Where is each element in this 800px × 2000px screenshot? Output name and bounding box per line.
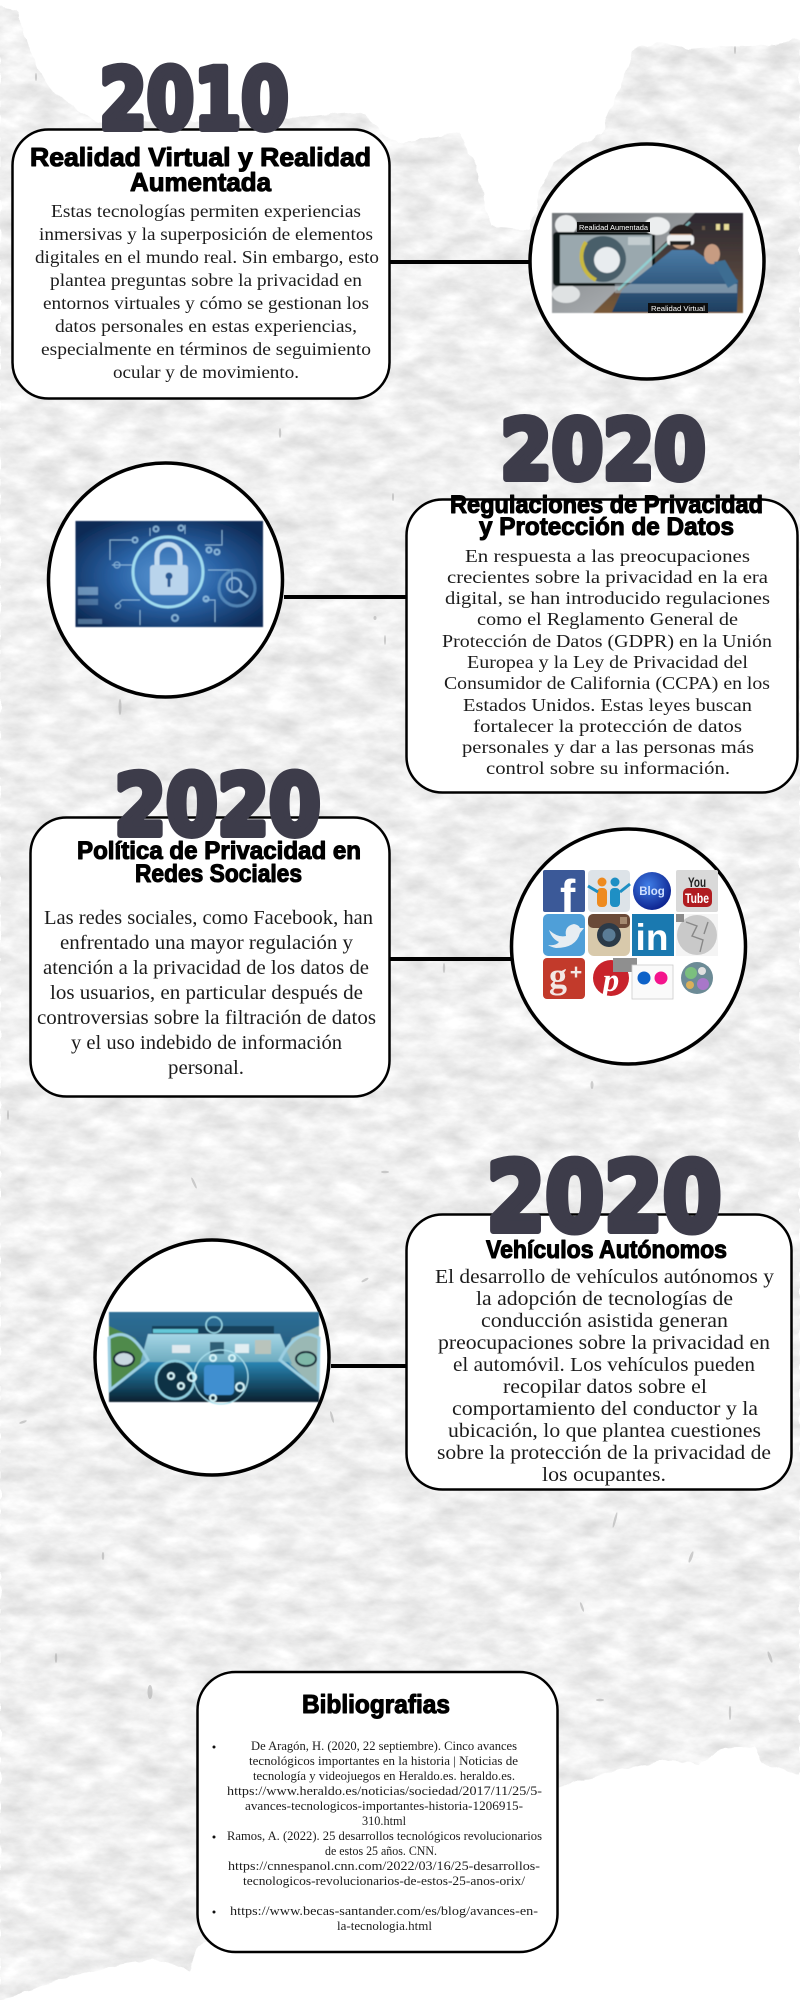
body text: realidad virtual: datos personales en estas experiencias, — [55, 316, 357, 336]
panel: regulaciones de privacidad — [406, 491, 798, 792]
icon: youtube: You — [688, 874, 706, 890]
icon: youtube: Tube — [685, 890, 709, 906]
icon: wikipedia — [676, 914, 718, 956]
icon: linkedin: in — [636, 917, 668, 958]
body text: redes sociales: Las redes sociales, como Facebook, han — [44, 908, 373, 929]
label: realidad aumentada: Realidad Aumentada — [579, 223, 649, 232]
photo circle: interior de coche autónomo — [95, 1240, 329, 1475]
reference 3: la-tecnologia.html — [337, 1918, 432, 1933]
panel: bibliografías — [198, 1672, 558, 1952]
reference 1 — [212, 1738, 542, 1828]
reference 1: avances-tecnologicos-importantes-historia-1206915- — [245, 1798, 523, 1813]
body text: regulaciones: En respuesta a las preocupaciones — [465, 546, 750, 566]
panel: realidad virtual — [12, 130, 390, 398]
reference 2: tecnologicos-revolucionarios-de-estos-25-anos-orix/ — [243, 1873, 525, 1888]
photo circle: candado digital — [48, 463, 282, 697]
body text: realidad virtual: ocular y de movimiento. — [113, 362, 299, 382]
reference 1: tecnológicos importantes en la historia | Noticias de — [249, 1753, 518, 1768]
reference list — [212, 1738, 542, 1933]
body text: realidad virtual: inmersivas y la superposición de elementos — [39, 224, 373, 244]
body text: realidad virtual: entornos virtuales y cómo se gestionan los — [43, 293, 369, 313]
body text: realidad virtual: Estas tecnologías permiten experiencias — [51, 201, 361, 221]
body text: redes sociales: enfrentado una mayor regulación y — [60, 933, 353, 954]
heading: regulaciones: Regulaciones de Privacidad — [450, 491, 763, 519]
heading: realidad virtual: Realidad Virtual y Realidad — [30, 142, 371, 172]
heading: realidad virtual: Aumentada — [130, 167, 272, 197]
body text: regulaciones: control sobre su información. — [486, 758, 730, 778]
body text: redes sociales — [37, 908, 376, 1079]
body text: vehículos autónomos: conducción asistida generan — [481, 1311, 728, 1332]
icon: blog — [633, 872, 671, 910]
body text: redes sociales: y el uso indebido de información — [71, 1033, 342, 1054]
reference 1: 310.html — [362, 1813, 406, 1828]
icon: pinterest — [593, 958, 640, 999]
body text: vehículos autónomos: la adopción de tecnologías de — [476, 1289, 733, 1310]
icon: instagram — [588, 914, 630, 956]
body text: redes sociales: controversias sobre la filtración de datos — [37, 1008, 376, 1029]
photo circle: realidad aumentada y virtual — [530, 144, 764, 379]
panel: política de privacidad en redes sociales — [30, 818, 390, 1096]
connector line 4 — [331, 1364, 406, 1368]
icon: pinterest: p — [600, 963, 619, 999]
reference 1: De Aragón, H. (2020, 22 septiembre). Cinco avances — [251, 1738, 517, 1753]
heading: redes sociales — [77, 837, 361, 888]
icon: google plus — [543, 956, 585, 999]
body text: vehículos autónomos: comportamiento del conductor y la — [452, 1399, 758, 1420]
body text: regulaciones: Estados Unidos. Estas leyes buscan — [463, 695, 752, 715]
reference 1: https://www.heraldo.es/noticias/sociedad/2017/11/25/5- — [227, 1783, 542, 1798]
body text: vehículos autónomos — [435, 1267, 774, 1486]
heading: redes sociales: Redes Sociales — [135, 860, 302, 888]
icon: blog: Blog — [639, 886, 665, 898]
body text: vehículos autónomos: El desarrollo de vehículos autónomos y — [435, 1267, 774, 1288]
heading: realidad virtual — [30, 142, 371, 197]
icon: slideshare — [588, 870, 630, 912]
body text: vehículos autónomos: los ocupantes. — [542, 1465, 666, 1486]
icon: google plus: g — [549, 956, 567, 996]
body text: regulaciones: fortalecer la protección de datos — [473, 716, 742, 736]
reference 2: Ramos, A. (2022). 25 desarrollos tecnológicos revolucionarios — [227, 1828, 542, 1843]
body text: regulaciones — [442, 546, 772, 778]
year 2020 (regulaciones): 2020 — [500, 404, 706, 498]
icon: flickr — [632, 965, 673, 999]
reference 1: tecnología y videojuegos en Heraldo.es. heraldo.es. — [253, 1768, 515, 1783]
label: realidad virtual: Realidad Virtual — [651, 304, 705, 313]
heading: bibliografías: Bibliografias — [302, 1689, 450, 1719]
body text: regulaciones: Europea y la Ley de Privacidad del — [467, 652, 748, 672]
body text: regulaciones: personales y dar a las personas más — [462, 737, 754, 757]
reference 3: https://www.becas-santander.com/es/blog/avances-en- — [230, 1903, 538, 1918]
icon: google plus: + — [570, 961, 582, 984]
icon: twitter — [543, 914, 585, 956]
year 2020 (redes sociales): 2020 — [114, 756, 320, 854]
body text: realidad virtual: plantea preguntas sobre la privacidad en — [50, 270, 362, 290]
body text: redes sociales: los usuarios, en particular después de — [50, 983, 363, 1004]
heading: regulaciones: y Protección de Datos — [479, 513, 734, 541]
reference 3 — [212, 1903, 538, 1933]
body text: vehículos autónomos: ubicación, lo que plantea cuestiones — [448, 1421, 761, 1442]
body text: vehículos autónomos: preocupaciones sobre la privacidad en — [438, 1333, 770, 1354]
year 2010: 2010 — [100, 50, 288, 148]
icon: colour globe — [681, 962, 713, 994]
body text: vehículos autónomos: el automóvil. Los vehículos pueden — [453, 1355, 755, 1376]
icon: facebook: f — [560, 870, 576, 922]
photo circle: iconos de redes sociales — [512, 829, 746, 1064]
connector line 1 — [389, 260, 531, 264]
reference 2: https://cnnespanol.cnn.com/2022/03/16/25-desarrollos- — [228, 1858, 540, 1873]
body text: regulaciones: Protección de Datos (GDPR) en la Unión — [442, 631, 772, 652]
panel: vehículos autónomos — [406, 1214, 792, 1490]
connector line 3 — [390, 957, 511, 961]
body text: regulaciones: digital, se han introducido regulaciones — [445, 588, 770, 608]
icon: facebook — [543, 870, 585, 922]
body text: regulaciones: Consumidor de California (CCPA) en los — [444, 673, 770, 694]
connector line 2 — [284, 595, 406, 599]
body text: realidad virtual: digitales en el mundo real. Sin embargo, esto — [35, 247, 379, 267]
reference 2 — [212, 1828, 542, 1888]
reference 2: de estos 25 años. CNN. — [325, 1843, 437, 1858]
heading: regulaciones — [450, 491, 763, 541]
body text: regulaciones: como el Reglamento General de — [477, 609, 738, 629]
body text: realidad virtual: especialmente en términos de seguimiento — [41, 339, 371, 359]
icon: youtube — [676, 870, 718, 912]
heading: redes sociales: Política de Privacidad en — [77, 837, 361, 865]
body text: redes sociales: personal. — [168, 1058, 244, 1079]
body text: regulaciones: crecientes sobre la privacidad en la era — [447, 567, 768, 587]
heading: vehículos autónomos: Vehículos Autónomos — [486, 1236, 727, 1264]
body text: realidad virtual — [35, 201, 379, 382]
body text: redes sociales: atención a la privacidad de los datos de — [43, 958, 369, 979]
body text: vehículos autónomos: recopilar datos sobre el — [503, 1377, 708, 1398]
year 2020 (vehículos): 2020 — [486, 1142, 722, 1254]
body text: vehículos autónomos: sobre la protección de la privacidad de — [437, 1443, 771, 1464]
